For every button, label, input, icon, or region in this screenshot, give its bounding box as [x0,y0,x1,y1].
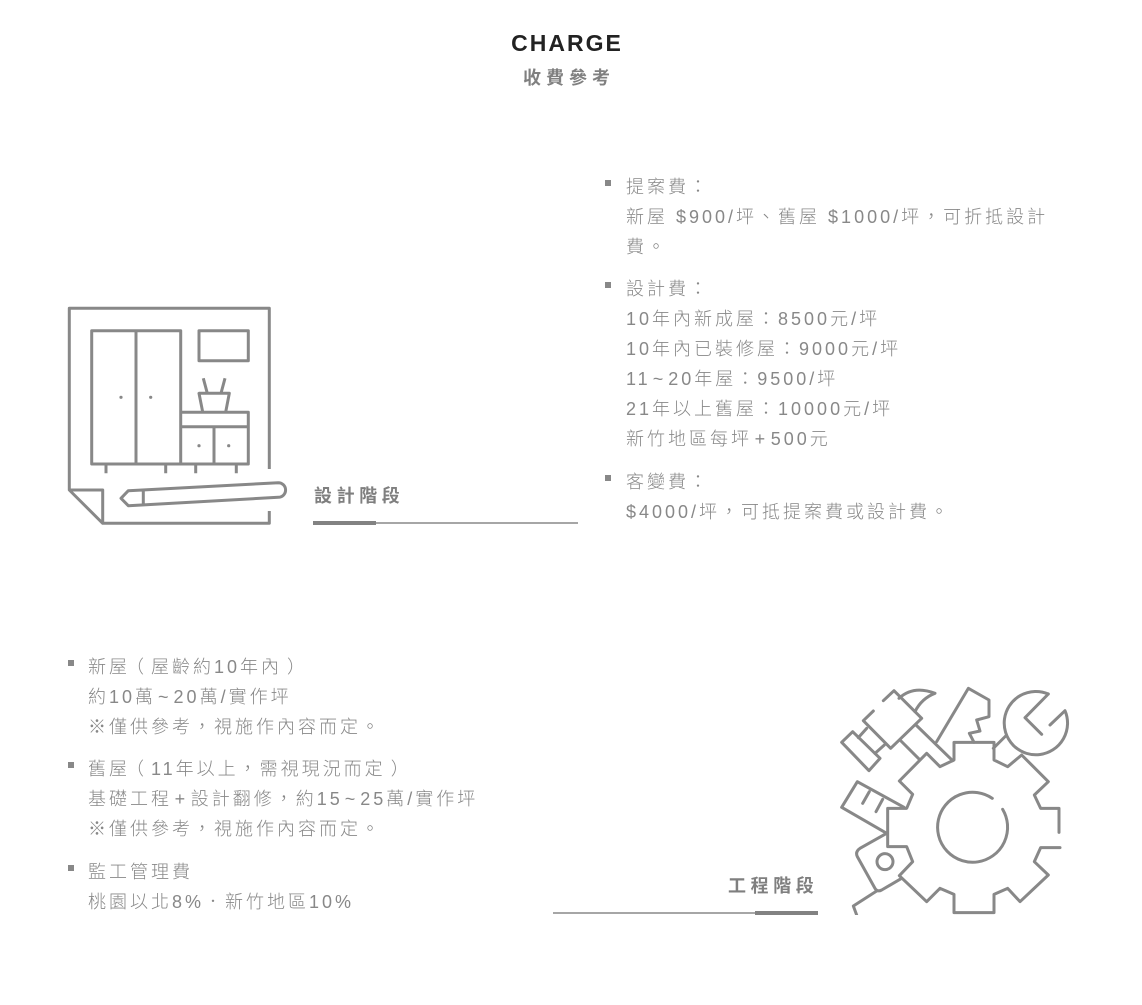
subtitle: 收費參考 [523,68,615,88]
icon: gear with hammer, saw, wrench, ruler and tag [840,686,1070,915]
heading: construction stage: 工程階段 [728,876,818,896]
list item: old house [68,759,478,839]
list item: new house: 新屋（屋齡約10年內 ） [88,657,308,677]
list item: supervision fee: 監工管理費 [88,862,193,882]
list item: change fee: $4000/坪，可抵提案費或設計費。 [626,502,951,522]
list item: old house: 基礎工程+設計翻修，約15~25萬/實作坪 [88,789,478,809]
list item: design fee: 21年以上舊屋：10000元/坪 [626,399,893,419]
list item: change fee: 客變費： [626,472,710,492]
list item: change fee [605,472,951,522]
list item: new house: 約10萬~20萬/實作坪 [88,687,292,707]
list item: design fee: 10年內已裝修屋：9000元/坪 [626,339,901,359]
list item: design fee: 新竹地區每坪+500元 [626,429,831,449]
heading: design stage: 設計階段 [314,486,404,506]
list item: old house: 舊屋（11年以上，需視現況而定 ） [88,759,412,779]
list item: supervision fee [68,862,354,912]
list item: new house [68,657,382,737]
icon: design blueprint with cabinet and pencil [68,306,288,525]
list item: design fee [605,279,901,449]
list item: supervision fee: 桃園以北8%．新竹地區10% [88,892,354,912]
list item: design fee: 設計費： [626,279,710,299]
divider: design stage [313,521,578,525]
list item: design fee: 10年內新成屋：8500元/坪 [626,309,880,329]
list item: proposal fee: 費。 [626,237,668,257]
divider: construction stage [553,911,818,915]
list item: proposal fee [605,177,1048,257]
list item: new house: ※僅供參考，視施作內容而定。 [88,717,382,737]
list item: proposal fee: 提案費： [626,177,710,197]
list item: proposal fee: 新屋 $900/坪、舊屋 $1000/坪，可折抵設計 [626,207,1048,227]
list item: design fee: 11~20年屋：9500/坪 [626,369,838,389]
title: CHARGE [511,30,623,56]
list item: old house: ※僅供參考，視施作內容而定。 [88,819,382,839]
